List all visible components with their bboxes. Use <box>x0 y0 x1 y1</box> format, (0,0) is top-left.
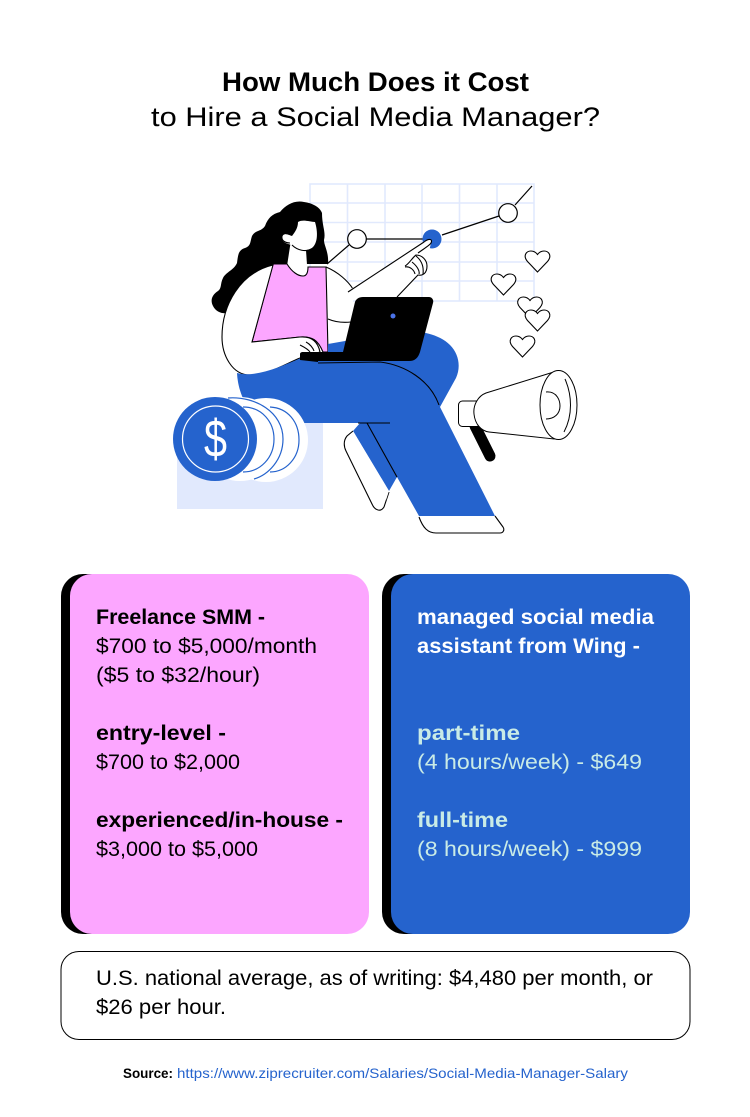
freelance text: $700 to $5,000/month <box>96 635 317 658</box>
icon: hearts <box>491 251 550 357</box>
back shoe <box>344 431 389 510</box>
front shoe <box>419 516 504 533</box>
arm pointing at chart <box>348 239 431 297</box>
freelance text: entry-level - <box>96 722 226 745</box>
panel: managed assistant costs <box>382 574 690 934</box>
pricing text: full-time <box>417 809 508 832</box>
chart line with data points <box>327 186 532 264</box>
source: Source: <box>123 1065 173 1081</box>
panel shadow <box>61 574 141 934</box>
panel background <box>70 574 369 934</box>
hair <box>212 202 328 313</box>
callout: national average: $26 per hour. <box>96 996 226 1019</box>
freelance text <box>96 606 343 861</box>
pricing text: (4 hours/week) - $649 <box>417 751 642 774</box>
laptop <box>300 297 433 362</box>
title: How Much Does it Cost <box>222 67 529 97</box>
pink top <box>252 264 328 352</box>
title: to Hire a Social Media Manager? <box>151 102 600 132</box>
freelance text: $3,000 to $5,000 <box>96 838 258 861</box>
freelance text: experienced/in-house - <box>96 809 343 832</box>
neck <box>287 240 308 280</box>
icon: dollar coins <box>173 397 308 482</box>
icon: dollar coins: $ <box>204 410 227 469</box>
freelance text: ($5 to $32/hour) <box>96 664 260 687</box>
callout: national average: U.S. national average, as of writing: $4,480 per month, or <box>96 967 653 990</box>
chart grid <box>310 184 534 301</box>
title <box>151 67 600 132</box>
freelance text: Freelance SMM - <box>96 606 265 629</box>
blue trousers <box>237 331 495 516</box>
pricing text: (8 hours/week) - $999 <box>417 838 642 861</box>
pricing text: part-time <box>417 722 520 745</box>
panel background <box>391 574 690 934</box>
illustration: woman with laptop, chart, coins and megaphone <box>173 184 577 533</box>
panel: freelance costs <box>61 574 369 934</box>
panel shadow <box>382 574 462 934</box>
callout: national average <box>61 952 690 1040</box>
heading: assistant from Wing - <box>417 635 640 658</box>
face <box>282 221 317 250</box>
woman: body and arm <box>222 221 432 375</box>
heading <box>417 606 654 658</box>
freelance text: $700 to $2,000 <box>96 751 240 774</box>
heading: managed social media <box>417 606 654 629</box>
icon: square behind coins <box>177 423 323 509</box>
pricing text <box>417 722 642 861</box>
source: https://www.ziprecruiter.com/Salaries/Social-Media-Manager-Salary <box>177 1065 628 1081</box>
icon: megaphone <box>458 370 577 456</box>
